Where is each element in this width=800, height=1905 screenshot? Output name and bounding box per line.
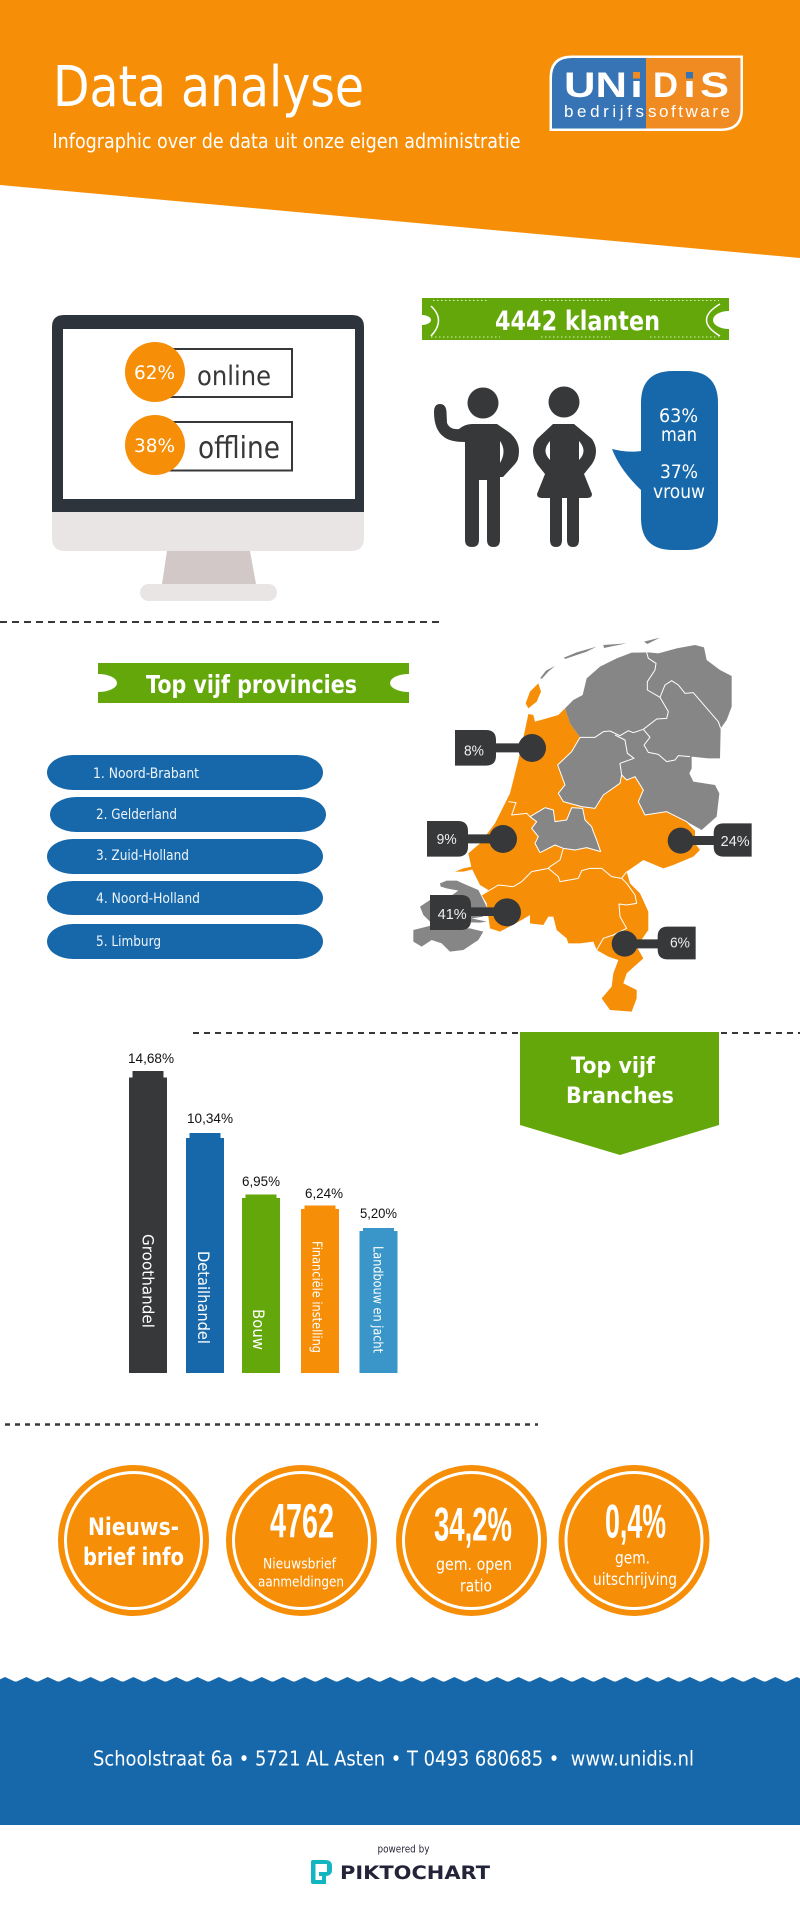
- credit: powered by Piktochart: [311, 1842, 490, 1884]
- callout: 9%: 9%: [437, 831, 457, 848]
- speech bubble: gender split: [612, 371, 718, 550]
- subtitle: Infographic over de data uit onze eigen administratie: [52, 129, 520, 153]
- bar: Landbouw en jacht: 5,20%: [360, 1205, 397, 1221]
- bar: Detailhandel: 10,34%: [187, 1110, 233, 1126]
- ribbon: Top vijf Branches: Top vijf: [571, 1054, 655, 1079]
- pill 5: 5. Limburg: [96, 934, 161, 950]
- bar: Groothandel: [128, 1050, 174, 1373]
- online stat: 62%: [134, 362, 175, 384]
- badge: 4762 aanmeldingen: 4762: [270, 1496, 334, 1549]
- logo: Unidis bedrijfssoftware: software: [648, 102, 730, 121]
- badge: gem. open ratio: gem. open: [436, 1555, 512, 1575]
- footer band: Schoolstraat 6a • 5721 AL Asten • T 0493 680685 • www.unidis.nl: [93, 1747, 694, 1771]
- provinces in grey: [530, 645, 732, 853]
- badge: gem. uitschrijving: [558, 1465, 710, 1616]
- badge: gem. uitschrijving: 0,4%: [605, 1494, 666, 1547]
- speech bubble: gender split: vrouw: [653, 481, 705, 503]
- logo: Unidis bedrijfssoftware: bedrijfs: [564, 102, 644, 121]
- badge: 4762 aanmeldingen: aanmeldingen: [258, 1575, 344, 1591]
- bar: Financiele instelling: [301, 1185, 343, 1373]
- bar: Bouw: Bouw: [249, 1309, 268, 1350]
- badge: gem. uitschrijving: uitschrijving: [593, 1570, 677, 1590]
- monitor panel: online vs offline: [52, 315, 364, 601]
- badge: gem. uitschrijving: gem.: [615, 1548, 650, 1568]
- icon: woman: [533, 386, 596, 547]
- speech bubble: gender split: 37%: [660, 461, 698, 483]
- bar: Landbouw en jacht: Landbouw en jacht: [370, 1246, 384, 1353]
- icon: man: [434, 388, 519, 547]
- header banner: [0, 0, 800, 258]
- list: top five provinces: [47, 755, 326, 959]
- badge: Nieuwsbrief info: brief info: [83, 1543, 184, 1571]
- offline stat: [125, 415, 292, 475]
- callout: 6%: 6%: [670, 934, 690, 951]
- offline stat: 38%: [134, 435, 175, 457]
- pill 1: [47, 755, 323, 790]
- ribbon: Top vijf Branches: [520, 1032, 719, 1155]
- Zeeland and Wadden islands: [413, 638, 660, 952]
- callout: 9%: [427, 821, 517, 857]
- bar: Groothandel: 14,68%: [128, 1050, 174, 1066]
- map of the Netherlands: [413, 638, 752, 1012]
- callout: 8%: [455, 730, 546, 766]
- icon: Piktochart mark: [311, 1860, 332, 1884]
- pill 3: 3. Zuid-Holland: [96, 848, 189, 864]
- logo: Unidis bedrijfssoftware: D: [653, 66, 678, 105]
- pill 4: 4. Noord-Holland: [96, 891, 200, 907]
- badge: gem. open ratio: 34,2%: [434, 1498, 512, 1551]
- ribbon: 4442 klanten: [413, 298, 745, 340]
- callout: 8%: 8%: [464, 743, 484, 760]
- bar: Groothandel: Groothandel: [138, 1234, 158, 1328]
- bar: Financiele instelling: 6,24%: [305, 1185, 343, 1201]
- pill 3: [47, 839, 323, 874]
- logo: Unidis bedrijfssoftware: I: [630, 66, 642, 105]
- callout: 6%: [612, 927, 696, 959]
- pill 4: [47, 881, 323, 915]
- online stat: online: [197, 361, 271, 392]
- callout: 41%: 41%: [438, 906, 467, 923]
- offline stat: offline: [198, 431, 280, 466]
- logo: Unidis bedrijfssoftware: UN: [564, 66, 627, 105]
- callout: 24%: 24%: [721, 833, 750, 850]
- callout: 41%: [430, 895, 521, 930]
- badge: 4762 aanmeldingen: Nieuwsbrief: [263, 1556, 337, 1572]
- pill 1: 1. Noord-Brabant: [93, 766, 199, 782]
- bar: Landbouw en jacht: [360, 1205, 398, 1373]
- title: Data analyse: [53, 55, 364, 120]
- ribbon: 4442 klanten: 4442 klanten: [495, 306, 660, 337]
- bar: Detailhandel: [186, 1110, 233, 1373]
- logo: Unidis bedrijfssoftware: I: [684, 66, 696, 105]
- online stat: [125, 342, 292, 402]
- badge: gem. open ratio: [396, 1465, 547, 1616]
- speech bubble: gender split: man: [661, 424, 697, 446]
- ribbon: Top vijf provincies: [79, 663, 428, 703]
- callout: 24%: [668, 823, 752, 857]
- provinces in orange: [455, 683, 700, 1012]
- credit: powered by Piktochart: PIKTOCHART: [340, 1862, 490, 1884]
- logo: Unidis bedrijfssoftware: [550, 56, 743, 131]
- bar chart: top five branches: [128, 1050, 398, 1373]
- speech bubble: gender split: 63%: [659, 405, 698, 427]
- bar: Financiele instelling: Financiële instelling: [308, 1241, 324, 1353]
- pill 2: 2. Gelderland: [96, 807, 177, 823]
- credit: powered by Piktochart: powered by: [378, 1842, 430, 1855]
- pill 5: [47, 924, 323, 959]
- bar: Bouw: 6,95%: [242, 1173, 280, 1189]
- bar: Bouw: [242, 1173, 280, 1373]
- footer band: [0, 1677, 800, 1825]
- bar: Detailhandel: Detailhandel: [194, 1251, 213, 1344]
- badge: Nieuwsbrief info: [58, 1465, 209, 1616]
- badge: 4762 aanmeldingen: [226, 1465, 377, 1616]
- badge: gem. open ratio: ratio: [460, 1577, 492, 1597]
- ribbon: Top vijf Branches: Branches: [566, 1084, 674, 1109]
- badge: Nieuwsbrief info: Nieuws-: [88, 1513, 179, 1541]
- logo: Unidis bedrijfssoftware: S: [700, 66, 729, 105]
- pill 2: [50, 797, 326, 832]
- ribbon: Top vijf provincies: Top vijf provincies: [146, 670, 357, 699]
